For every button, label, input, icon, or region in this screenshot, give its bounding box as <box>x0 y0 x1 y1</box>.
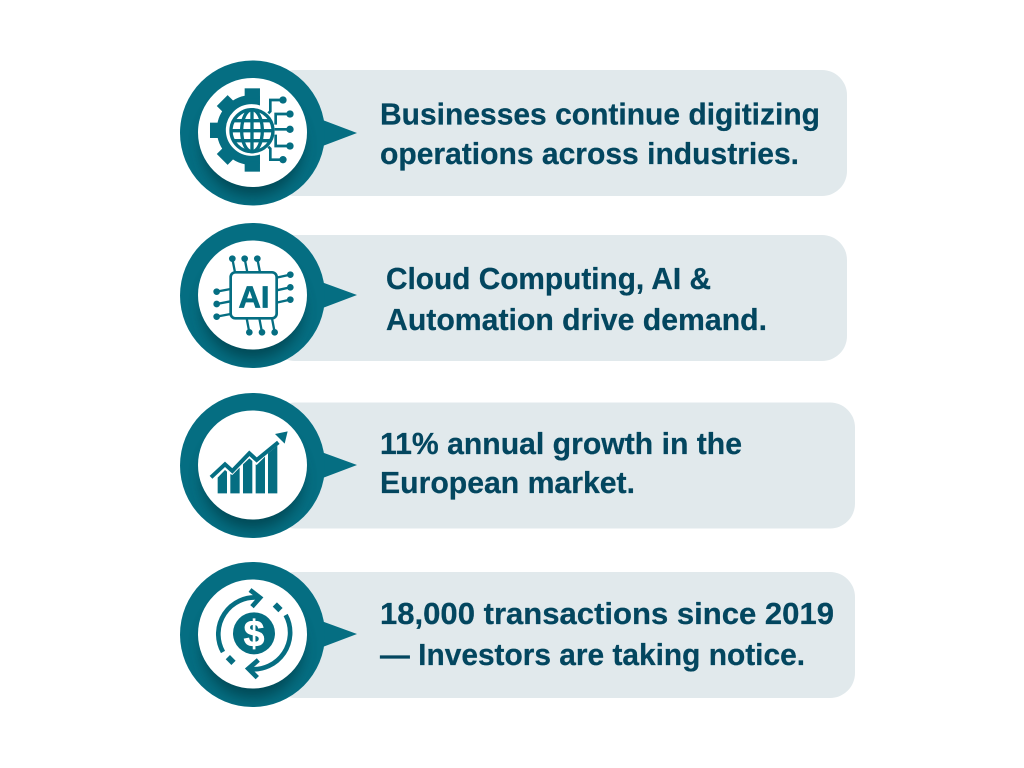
row 1: digitizing businesses <box>180 60 847 206</box>
text: row 2: Cloud Computing, AI & <box>386 262 711 296</box>
text: row 3 <box>380 427 742 500</box>
badge: row 1 circle with pointer <box>180 60 357 206</box>
badge: row 4 circle with pointer <box>180 562 357 707</box>
text: row 3: European market. <box>380 466 635 500</box>
text: row 4: 18,000 transactions since 2019 <box>380 597 834 631</box>
text: row 1: operations across industries. <box>380 137 799 171</box>
badge: row 3 circle with pointer <box>180 393 357 538</box>
icon: dollar with circular arrows: $ <box>244 612 265 654</box>
row 3: annual growth <box>180 393 855 538</box>
icon: gear, globe and circuit <box>210 88 294 172</box>
text: row 1: Businesses continue digitizing <box>380 98 820 132</box>
panel: row 4 background <box>270 572 855 698</box>
text: row 2: Automation drive demand. <box>386 303 767 337</box>
icon: rising bar chart with arrow <box>211 431 288 493</box>
panel: row 2 background <box>270 235 847 361</box>
text: row 4 <box>380 597 834 672</box>
row 4: transactions <box>180 562 855 707</box>
text: row 1 <box>380 98 820 171</box>
text: row 3: 11% annual growth in the <box>380 427 742 461</box>
panel: row 3 background <box>270 402 855 528</box>
icon: AI chip <box>213 255 294 336</box>
badge: row 2 circle with pointer <box>180 223 357 368</box>
panel: row 1 background <box>270 70 847 196</box>
icon: dollar with circular arrows <box>218 590 290 678</box>
icon: AI chip: AI <box>238 280 269 315</box>
text: row 4: — Investors are taking notice. <box>380 638 805 672</box>
text: row 2 <box>386 262 767 337</box>
row 2: cloud and AI <box>180 223 847 368</box>
